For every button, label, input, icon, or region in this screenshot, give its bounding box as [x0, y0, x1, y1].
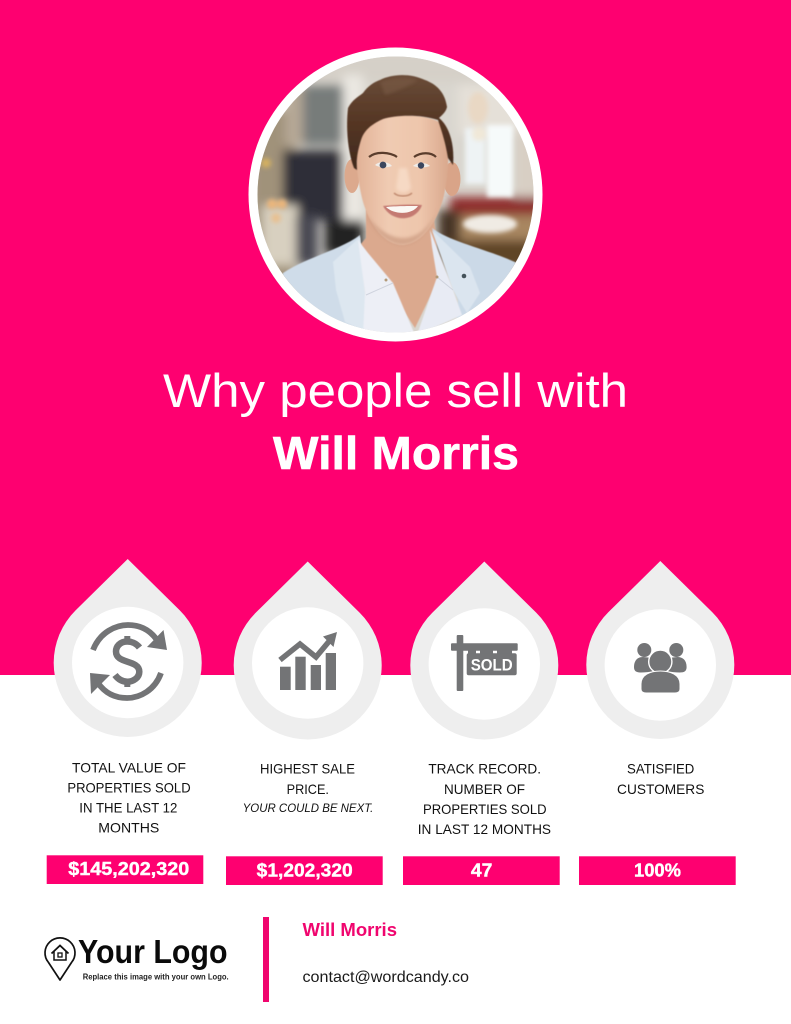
title [163, 364, 628, 479]
stat label: total value: MONTHS [98, 820, 159, 836]
value bar: properties sold [403, 856, 560, 885]
neck and chest [360, 205, 438, 328]
icon: location pin with house [45, 938, 75, 980]
pin and buttons [462, 274, 466, 278]
lapels [333, 237, 366, 332]
portrait photo in white circular frame [248, 48, 550, 345]
stat label: track record: TRACK RECORD. [428, 760, 541, 776]
jaw shadow [370, 220, 432, 246]
value bar: total value: $145,202,320 [68, 858, 189, 879]
stat label: total value: TOTAL VALUE OF [72, 760, 186, 776]
mouth [383, 205, 422, 218]
stat label: highest sale price: PRICE. [287, 781, 329, 797]
stat label: total value: IN THE LAST 12 [79, 800, 178, 816]
value bar: properties sold: 47 [471, 860, 492, 880]
icon: sold sign [451, 635, 518, 691]
title: Will Morris [273, 427, 519, 479]
contact block [302, 919, 469, 986]
contact block: Will Morris [302, 919, 397, 940]
value bar: satisfied customers [579, 856, 736, 885]
stat label: satisfied customers: SATISFIED [627, 760, 694, 776]
stat icon drop 3 [410, 562, 558, 739]
stat label: satisfied customers [617, 760, 704, 797]
hair [347, 75, 453, 170]
jacket left [282, 234, 362, 327]
jacket right [432, 228, 516, 318]
nose [396, 168, 411, 192]
stat label: track record: IN LAST 12 MONTHS [418, 821, 551, 837]
stat label: highest sale price: HIGHEST SALE [260, 760, 355, 776]
stat label: track record [418, 760, 551, 837]
vertical divider [263, 917, 269, 1002]
icon: sold sign: SOLD [471, 656, 513, 675]
value bar: highest sale: $1,202,320 [257, 860, 353, 880]
stat icon drop 4 [586, 561, 734, 739]
logo: Replace this image with your own Logo. [83, 972, 229, 982]
ears [344, 159, 360, 193]
contact block: contact@wordcandy.co [302, 969, 469, 986]
stat label: highest sale price [243, 760, 373, 815]
icon: dollar exchange arrows [90, 625, 167, 698]
title: Why people sell with [163, 364, 628, 417]
logo [45, 933, 229, 982]
collar shadow lines [366, 277, 453, 295]
value bar: total value [47, 855, 203, 884]
icon: rising bar chart [280, 632, 337, 690]
stat icon drop 1 [54, 559, 202, 737]
eyebrows [369, 153, 397, 157]
stat icon drop 2 [234, 562, 382, 739]
eyes [375, 162, 392, 167]
icon: group of people [634, 643, 687, 693]
stat label: total value [67, 760, 191, 836]
stat label: track record: PROPERTIES SOLD [423, 801, 547, 817]
pink header background [0, 0, 791, 675]
stat label: track record: NUMBER OF [444, 781, 525, 797]
stat label: satisfied customers: CUSTOMERS [617, 781, 704, 797]
hair highlights [382, 78, 414, 94]
face [356, 115, 448, 245]
stat label: total value: PROPERTIES SOLD [67, 780, 191, 796]
value bar: highest sale [226, 856, 383, 885]
stat label: highest sale price: YOUR COULD BE NEXT. [243, 801, 373, 815]
shirt [358, 240, 415, 335]
logo: Your Logo [78, 933, 228, 970]
value bar: satisfied customers: 100% [634, 860, 681, 880]
